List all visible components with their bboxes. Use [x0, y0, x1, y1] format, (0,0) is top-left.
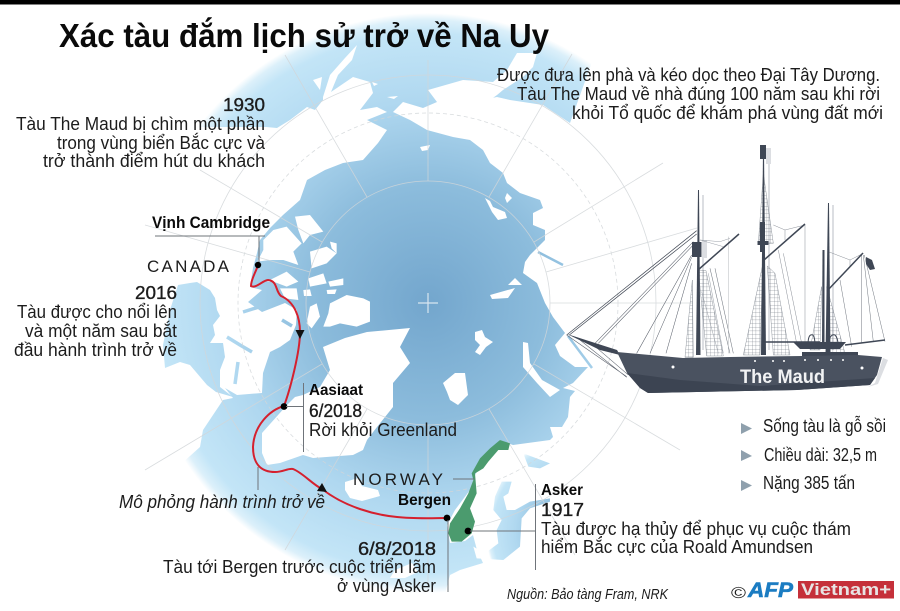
arrow: toward Norway	[317, 483, 327, 492]
title: Xác tàu đắm lịch sử trở về Na Uy	[59, 17, 550, 54]
text block: Asker 1917	[541, 482, 851, 557]
Okhotsk channel and Siberian inlets	[538, 252, 592, 368]
Vietnam+ logo: Vietnam+	[801, 580, 891, 599]
leader lines	[155, 236, 536, 592]
gaffs and boom	[698, 224, 885, 345]
aft rigging	[702, 225, 885, 353]
ship facts	[741, 415, 886, 493]
land masses	[60, 40, 760, 611]
text block: 1930: Tàu The Maud bị chìm một phần	[16, 114, 265, 134]
text block: Asker 1917: Asker	[541, 482, 583, 499]
ocean disc	[138, 13, 718, 593]
ratlines	[685, 173, 845, 357]
top black bar	[0, 0, 900, 4]
text block: 6/8/2018: ở vùng Asker	[337, 576, 436, 596]
text block: 1930: 1930	[223, 95, 265, 115]
text block: Aasiaat: Aasiaat	[309, 382, 364, 399]
lifeboat	[793, 342, 846, 349]
label: Norway: NORWAY	[353, 470, 443, 489]
text block: Asker 1917: 1917	[541, 500, 584, 520]
lower hull	[627, 373, 875, 393]
land: Siberia and Europe	[393, 40, 760, 611]
text block: homecoming	[497, 65, 883, 123]
credit logos	[731, 579, 894, 602]
text block: homecoming: khỏi Tổ quốc để khám phá vùng đất mới	[572, 103, 883, 123]
point: Asker	[465, 528, 471, 534]
label: Vịnh Cambridge: Vịnh Cambridge	[152, 214, 270, 232]
text block: 2016: và một năm sau bắt	[25, 320, 177, 341]
text block: Aasiaat	[309, 382, 457, 440]
text block: Asker 1917: Tàu được hạ thủy để phục vụ cuộc thám	[541, 519, 851, 539]
land: Chukotka strip	[393, 53, 537, 115]
land: Arctic islands	[313, 77, 560, 405]
arrow: southbound in Baffin Bay	[296, 330, 304, 339]
route caption: Mô phỏng hành trình trở về	[119, 492, 325, 512]
land: Britain and Ireland	[390, 563, 418, 578]
ship shadow	[702, 148, 888, 387]
fact: weight: Nặng 385 tấn	[763, 473, 855, 493]
channels between Canadian islands	[227, 300, 292, 384]
text block: 6/8/2018: 6/8/2018	[358, 539, 436, 559]
portholes	[672, 359, 864, 370]
Norway in green	[448, 440, 510, 542]
text block: 1930	[16, 95, 266, 171]
text block: 6/8/2018	[163, 539, 436, 596]
North Pole cross	[418, 293, 438, 313]
masts and spars	[692, 145, 830, 355]
ship: The Maud	[567, 145, 888, 393]
Baltic and White Sea	[473, 453, 550, 560]
text block: Asker 1917: hiểm Bắc cực của Roald Amundsen	[541, 536, 813, 557]
point: Bergen	[444, 515, 450, 521]
text block: 1930: trở thành điểm hút du khách	[43, 151, 265, 171]
label: Canada: CANADA	[147, 257, 230, 276]
source: Nguồn: Bảo tàng Fram, NRK	[507, 587, 669, 603]
AFP logo: AFP	[747, 579, 794, 602]
hull	[617, 352, 882, 393]
text block: homecoming: Được đưa lên phà và kéo dọc theo Đại Tây Dương.	[497, 65, 880, 85]
text block: homecoming: Tàu The Maud về nhà đúng 100 năm sau khi rời	[517, 84, 880, 104]
Canadian waters	[163, 282, 233, 397]
text block: 2016: đầu hành trình trở về	[14, 340, 177, 360]
text block: 2016: 2016	[135, 283, 177, 303]
land: Greenland	[262, 328, 410, 465]
polar map	[60, 13, 760, 611]
text block: Aasiaat: Rời khỏi Greenland	[309, 420, 457, 440]
Arctic archipelago islands	[257, 215, 370, 328]
return route	[251, 262, 471, 534]
text block: Aasiaat: 6/2018	[309, 401, 362, 421]
text block: 2016	[14, 283, 177, 360]
graticule	[145, 54, 697, 590]
bow rigging	[567, 231, 733, 377]
text block: 2016: Tàu được cho nổi lên	[17, 302, 177, 322]
point: Aasiaat	[281, 403, 287, 410]
text block: 1930: trong vùng biển Bắc cực và	[57, 132, 266, 153]
ship name: The Maud	[740, 367, 825, 388]
label: Bergen: Bergen	[398, 492, 451, 509]
bowsprit	[567, 334, 620, 355]
deck	[802, 352, 858, 356]
land: Iceland	[345, 478, 380, 501]
red route line	[251, 265, 447, 518]
stern flag	[866, 257, 875, 270]
copyright sign: ©	[731, 585, 746, 602]
point: Cambridge Bay	[255, 262, 261, 268]
text block: 6/8/2018: Tàu tới Bergen trước cuộc triển lãm	[163, 557, 436, 577]
land: Alaska and Canada	[60, 45, 387, 475]
